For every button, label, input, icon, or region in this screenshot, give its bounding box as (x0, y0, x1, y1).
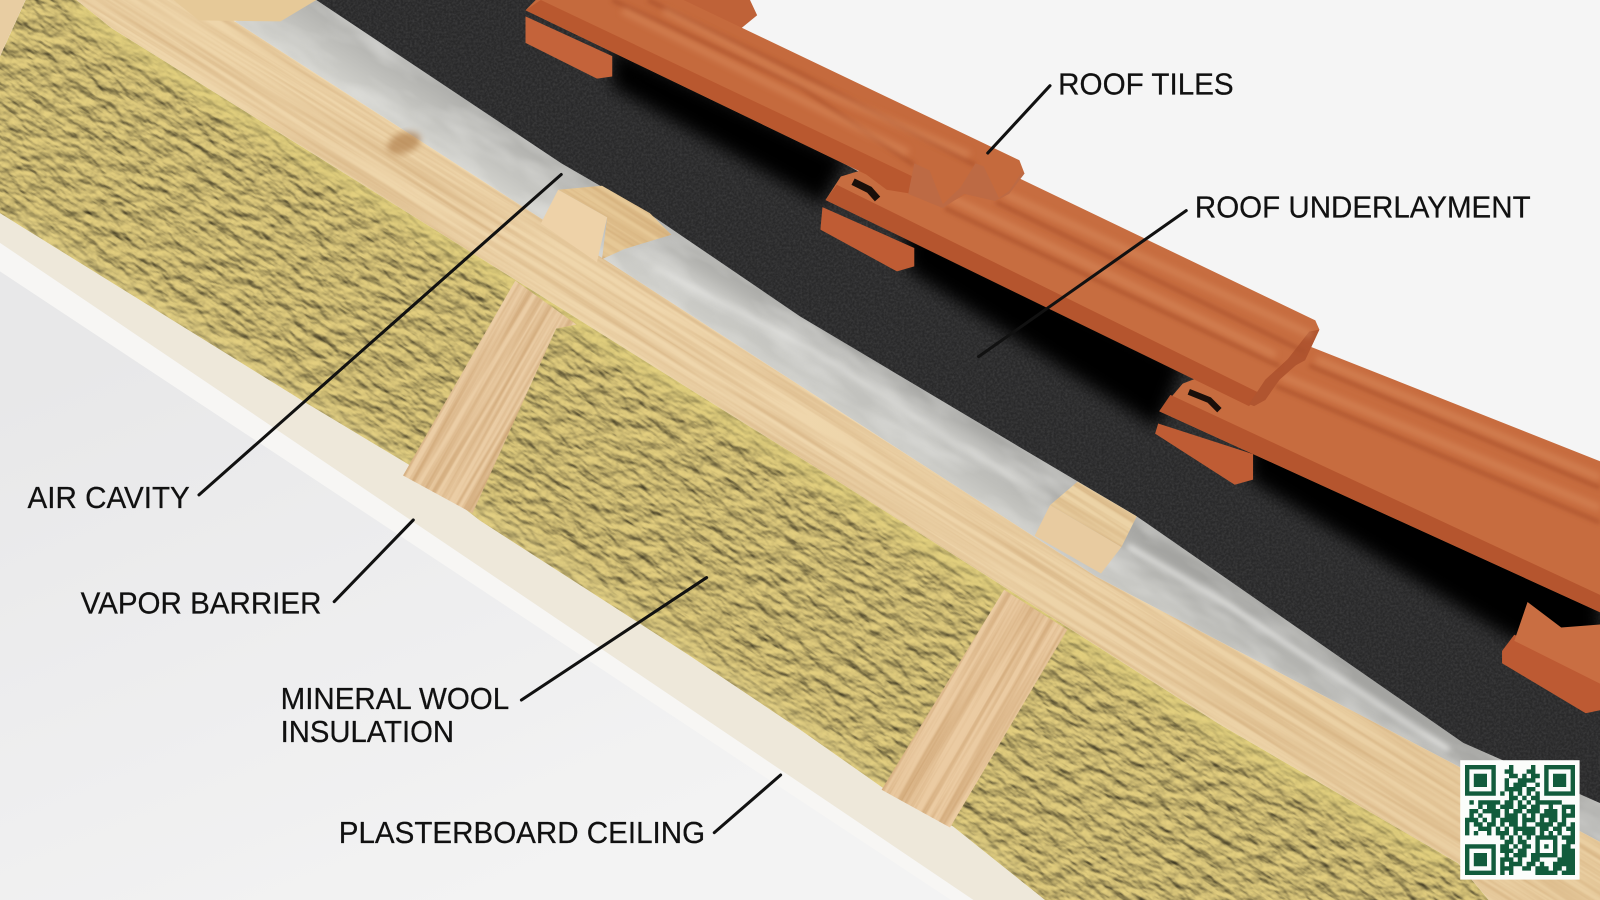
wood knot (384, 127, 424, 158)
tile row two (820, 153, 1319, 406)
stud right (882, 590, 1067, 828)
vapor barrier strip (0, 209, 1051, 900)
label: mineral wool insulation: INSULATION (281, 715, 454, 749)
tile shadows on membrane (612, 46, 1600, 658)
tile row three (1155, 337, 1600, 612)
label: vapor barrier: VAPOR BARRIER (81, 586, 321, 620)
plasterboard ceiling (0, 213, 1051, 900)
batten block one (541, 186, 671, 262)
air cavity foil (235, 0, 1600, 842)
label: roof underlayment: ROOF UNDERLAYMENT (1195, 190, 1531, 224)
label: plasterboard ceiling: PLASTERBOARD CEILING (339, 816, 705, 850)
label: mineral wool insulation (281, 682, 509, 749)
top left timber fragments (0, 0, 316, 56)
roof underlayment membrane (316, 0, 1600, 803)
tile row one (526, 0, 1024, 208)
QR code (1460, 760, 1580, 880)
batten block two (1035, 482, 1137, 573)
label: mineral wool insulation: MINERAL WOOL (281, 682, 509, 716)
label: air cavity: AIR CAVITY (28, 481, 190, 515)
tile row four (1502, 602, 1600, 713)
stud left (403, 281, 577, 513)
label: roof tiles: ROOF TILES (1058, 67, 1234, 101)
leader lines (199, 86, 1186, 833)
